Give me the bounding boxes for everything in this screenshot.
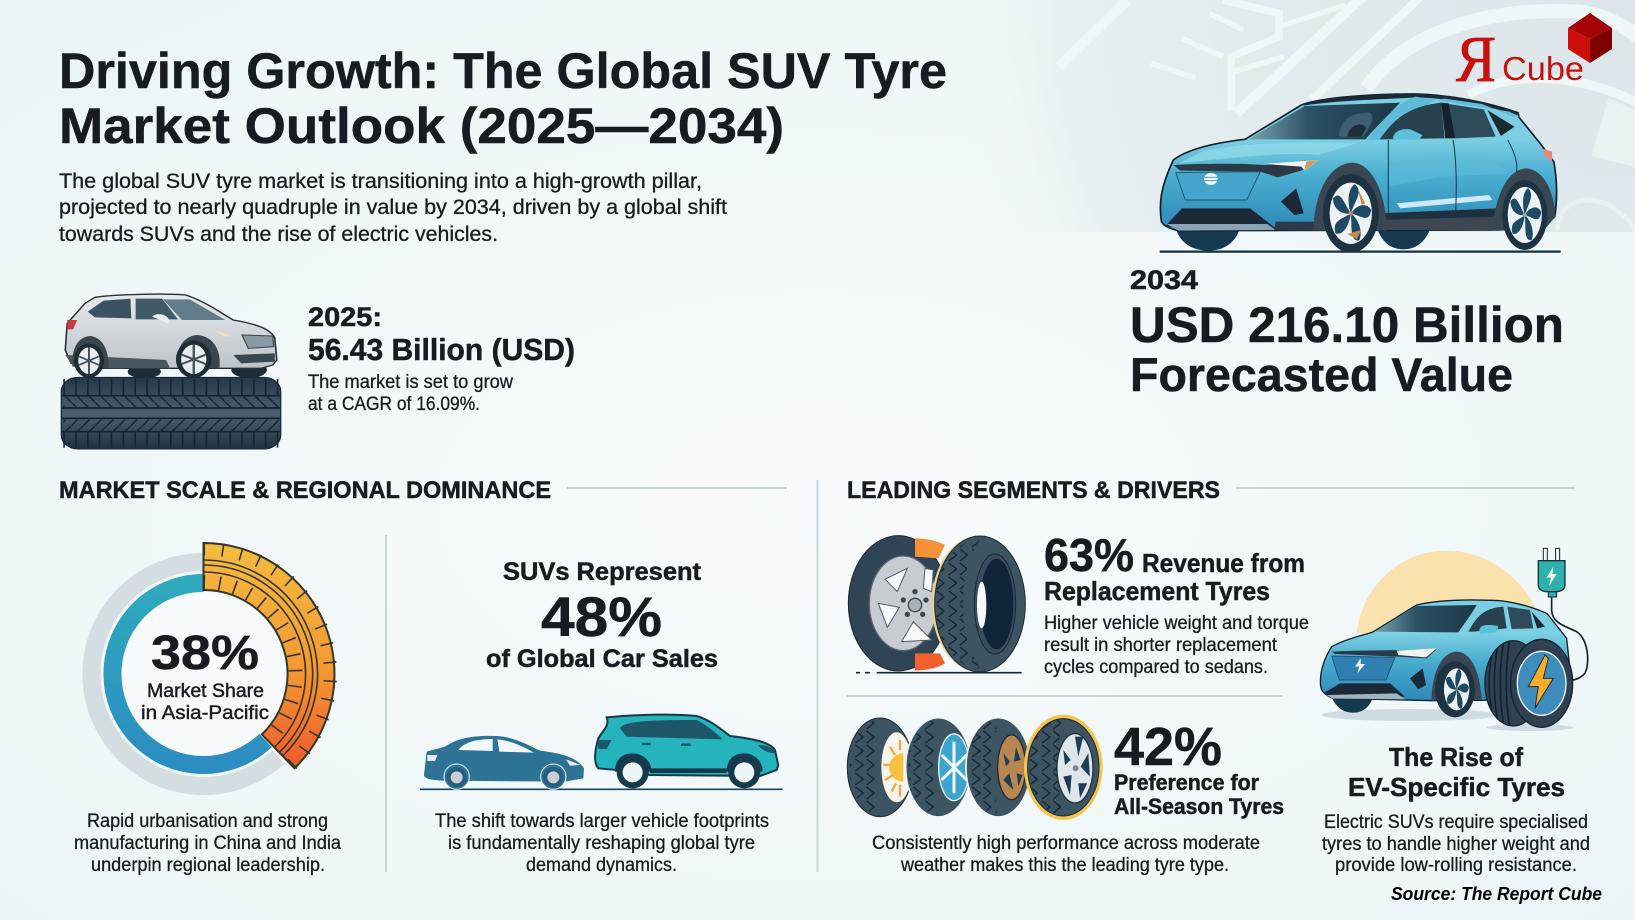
EV caption: provide low-rolling resistance.	[1335, 855, 1577, 876]
EV heading: The Rise of	[1389, 742, 1523, 772]
title: Market Outlook (2025—2034)	[59, 98, 784, 154]
intro text: projected to nearly quadruple in value by 2034, driven by a global shift	[59, 196, 727, 219]
heading: market scale: MARKET SCALE & REGIONAL DOMINANCE	[59, 477, 551, 504]
logo: RCube: Я	[1456, 23, 1496, 96]
intro text	[59, 170, 727, 246]
forecast 2034 callout: USD 216.10 Billion	[1130, 297, 1564, 353]
donut label: Market Share	[147, 681, 264, 702]
stat: 48%: SUVs Represent	[503, 558, 702, 586]
stat: 63%: 63%	[1044, 529, 1134, 581]
icon: wheel and tyre	[848, 536, 1025, 673]
panel: replacement tyres	[848, 529, 1309, 678]
stat: 63%: Revenue from	[1142, 548, 1305, 578]
panel: Asia-Pacific donut	[74, 543, 341, 876]
forecast 2034 callout: Forecasted Value	[1130, 348, 1513, 401]
SUV caption: demand dynamics.	[526, 855, 677, 876]
title: Driving Growth: The Global SUV Tyre	[59, 43, 947, 99]
title	[59, 43, 947, 154]
stat: 42%: Preference for	[1114, 770, 1259, 795]
stat: 63%: cycles compared to sedans.	[1044, 657, 1268, 678]
stat: 63%: result in shorter replacement	[1044, 635, 1278, 656]
icon: silver SUV on tyre	[61, 294, 281, 449]
donut caption: Rapid urbanisation and strong	[87, 811, 328, 832]
stat: 2025 value: at a CAGR of 16.09%.	[308, 393, 480, 415]
stat: 48%: 48%	[541, 585, 662, 648]
icon: EV with plug and tyre	[1320, 548, 1588, 731]
SUV caption: The shift towards larger vehicle footprints	[435, 811, 769, 832]
donut caption: underpin regional leadership.	[91, 855, 325, 876]
forecast 2034 callout	[1130, 265, 1564, 401]
SUV caption	[435, 811, 769, 876]
EV heading: EV-Specific Tyres	[1348, 772, 1565, 802]
source note: Source: The Report Cube	[1391, 884, 1602, 904]
heading: leading segments: LEADING SEGMENTS & DRIVERS	[847, 477, 1220, 504]
logo: RCube: Cube	[1502, 50, 1584, 87]
stat: 42%: 42%	[1114, 717, 1222, 777]
intro text: towards SUVs and the rise of electric vehicles.	[59, 223, 498, 246]
stat: 63%	[1044, 529, 1309, 678]
donut label: in Asia-Pacific	[141, 703, 269, 724]
stat: 42%: All-Season Tyres	[1114, 794, 1284, 819]
icon: four tyres	[847, 715, 1103, 820]
donut chart 38%	[91, 543, 334, 786]
EV caption: tyres to handle higher weight and	[1322, 834, 1590, 855]
donut label: 38%	[151, 627, 259, 680]
all-season caption: weather makes this the leading tyre type.	[900, 855, 1229, 876]
all-season caption	[872, 833, 1260, 876]
intro text: The global SUV tyre market is transitioning into a high-growth pillar,	[59, 170, 702, 193]
icon: sedan and SUV	[420, 715, 783, 789]
panel: SUV share	[420, 558, 783, 876]
EV caption: Electric SUVs require specialised	[1324, 812, 1588, 833]
donut caption: manufacturing in China and India	[74, 833, 341, 854]
EV caption	[1322, 812, 1590, 876]
panel: EV-specific tyres	[1320, 548, 1590, 876]
stat: 63%: Replacement Tyres	[1044, 576, 1270, 606]
stat: 42%	[1114, 717, 1284, 819]
donut label	[141, 627, 269, 724]
stat: 2025 value: The market is set to grow	[308, 371, 514, 393]
donut caption	[74, 811, 341, 876]
stat: 2025 value: 2025:	[308, 302, 382, 332]
logo: RCube	[1456, 13, 1612, 96]
stat: 48%	[486, 558, 718, 673]
stat: 63%: Higher vehicle weight and torque	[1044, 613, 1309, 634]
SUV caption: is fundamentally reshaping global tyre	[448, 833, 755, 854]
icon: blue SUV 2034	[1160, 94, 1561, 253]
all-season caption: Consistently high performance across moderate	[872, 833, 1260, 854]
stat: 2025 value	[308, 302, 575, 415]
stat: 2025 value: 56.43 Billion (USD)	[308, 332, 575, 367]
panel: all-season tyres	[847, 715, 1284, 876]
EV heading	[1348, 742, 1565, 802]
forecast 2034 callout: 2034	[1130, 265, 1198, 295]
stat: 48%: of Global Car Sales	[486, 645, 718, 673]
